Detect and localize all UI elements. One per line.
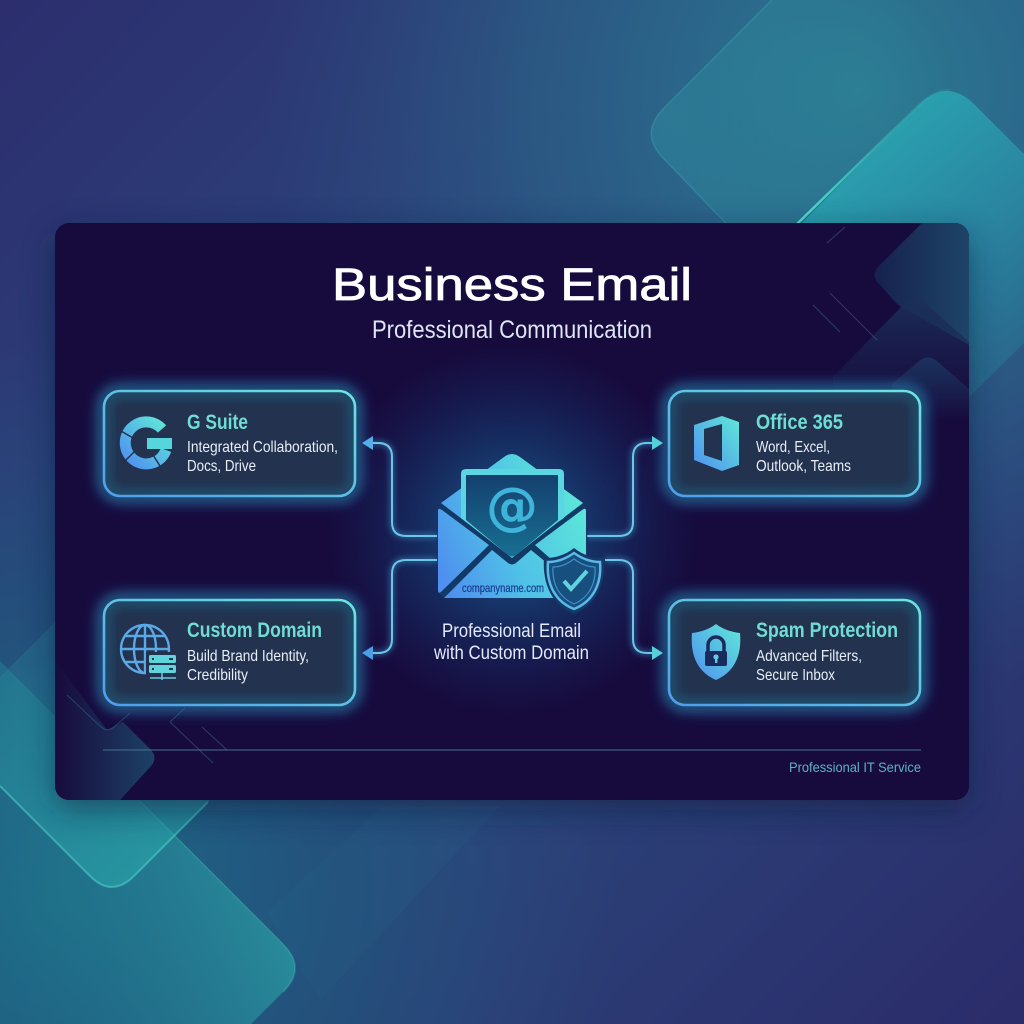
card: Office 365	[669, 391, 920, 496]
arrow: to Office 365	[587, 436, 663, 536]
text: G Suite description: Integrated Collaboration,	[187, 439, 338, 456]
heading: Office 365: Office 365	[756, 411, 843, 434]
subtitle: Professional Communication	[372, 316, 652, 344]
domain label: companyname.com	[462, 581, 544, 595]
card: Custom Domain	[104, 600, 355, 705]
main panel	[55, 223, 969, 800]
text: G Suite description	[187, 439, 338, 475]
center caption: Professional Email	[442, 621, 581, 642]
panel shadow	[55, 233, 969, 810]
text: Spam Protection description	[756, 648, 862, 684]
arrow: to Custom Domain	[362, 560, 437, 660]
center caption: with Custom Domain	[433, 643, 589, 664]
text: G Suite description: Docs, Drive	[187, 458, 256, 475]
icon: Office logo	[694, 416, 739, 471]
heading: G Suite: G Suite	[187, 411, 248, 434]
card: Spam Protection	[669, 600, 920, 705]
icon: email envelope	[438, 454, 604, 614]
card: G Suite	[104, 391, 355, 496]
center caption	[433, 621, 589, 664]
arrow: to Spam Protection	[605, 560, 663, 660]
at symbol: @	[486, 477, 538, 537]
text: Office 365 description: Word, Excel,	[756, 439, 830, 456]
heading: Custom Domain: Custom Domain	[187, 619, 322, 642]
text: Office 365 description: Outlook, Teams	[756, 458, 851, 475]
text: Spam Protection description: Advanced Filters,	[756, 648, 862, 665]
arrow: to G Suite	[362, 436, 437, 536]
icon: G logo	[121, 422, 172, 466]
icon: globe with server	[121, 625, 179, 680]
title: Business Email	[332, 259, 692, 310]
icon: shield with lock	[692, 624, 740, 680]
text: Spam Protection description: Secure Inbox	[756, 667, 835, 684]
icon: shield with check	[544, 548, 604, 614]
footer text: Professional IT Service	[789, 759, 921, 775]
text: Office 365 description	[756, 439, 851, 475]
text: Custom Domain description	[187, 648, 309, 684]
text: Custom Domain description: Credibility	[187, 667, 248, 684]
heading: Spam Protection: Spam Protection	[756, 619, 898, 642]
text: Custom Domain description: Build Brand Identity,	[187, 648, 309, 665]
